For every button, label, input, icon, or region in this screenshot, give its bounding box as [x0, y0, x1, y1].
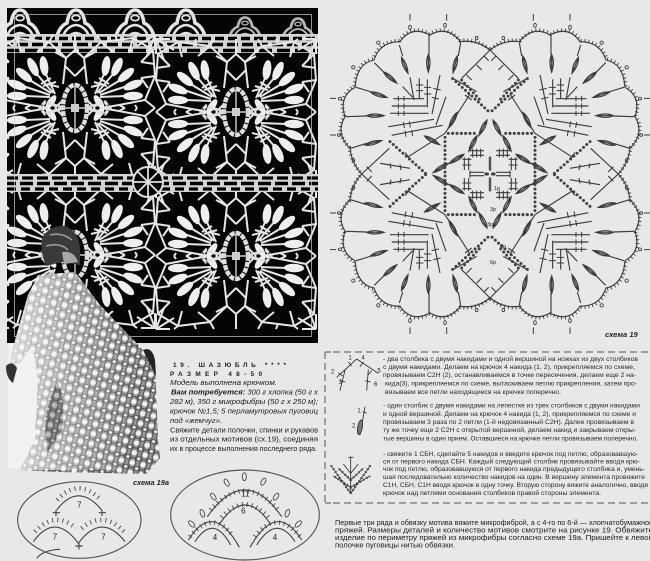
assembly instructions: Свяжите детали полочки, спинки и рукавов [170, 426, 318, 434]
stitch symbol 2: 1 [357, 409, 361, 415]
photo frame line [14, 14, 312, 336]
stitch description 3: крючок над петлями основания столбиков правой стороны элемента. [383, 489, 601, 497]
assembly instructions: их в процессе выполнения последнего ряда. [170, 444, 317, 453]
scheme row labels: 1р [494, 186, 500, 192]
materials: 282 м), 350 г микрофибры (50 г х 250 м); [169, 397, 318, 406]
lace motif: top-right [156, 39, 316, 185]
chart: scheme 19a right oval [171, 470, 319, 560]
stitch description 2: провязываем 3 раза по 2 петли (1-й недовязанный С2Н). Далее провязываем в [383, 418, 635, 426]
assembly instructions [170, 426, 318, 453]
closing paragraph: полочке пуговицы нитью обвязки. [335, 540, 455, 550]
chart: scheme 19a left oval: 7 [101, 532, 106, 541]
stitch description 2: ту же точку еще 2 С2Н с открытой вершиной, делаем накид и закрываем откры- [383, 426, 636, 434]
coat opening [45, 382, 63, 452]
stitch description 3 [383, 450, 648, 497]
stitch description 2: - один столбик с двумя накидами на лепестке из трех столбиков с двумя накидами [383, 402, 640, 410]
chart: scheme 19a left oval: 7 [53, 532, 58, 541]
stitch symbol 3 [331, 457, 371, 493]
lace motif: top-left [0, 35, 155, 181]
article title: 19. ШАЗЮБЛЬ **** [173, 362, 286, 369]
hands [6, 363, 17, 383]
scheme row labels: 5р [500, 244, 506, 250]
lace scalloped top edging [1, 10, 313, 37]
stitch symbol 1: 3 [339, 380, 343, 386]
stitch symbol 1: 5 [377, 369, 381, 375]
lace net band [2, 34, 318, 53]
stitch symbol 1: 1 [348, 355, 352, 361]
chart: scheme 19a right oval: 4 [213, 533, 218, 542]
lace motif: lower-left [0, 182, 155, 328]
closing paragraph: изделие по периметру пряжей из микрофибры согласно схеме 19а. Пришейте к левой [335, 533, 650, 542]
stitch description 3: - свяжите 1 СБН, сделайте 5 накидов и введите крючок под петлю, образовавшую- [383, 450, 638, 458]
article text block [169, 362, 318, 453]
materials [169, 388, 318, 425]
stitch description 2: и одной вершиной. Делаем на крючок 4 накида (1, 2), прикрепляемся по схеме и [383, 410, 637, 418]
caption: scheme 19a: схема 19а [133, 478, 169, 487]
chart: scheme 19a right oval: 11 [241, 490, 250, 499]
chart: scheme 19a left oval [18, 482, 141, 558]
stitch description 1: вязываем все петли находящиеся на крючке поперечно. [385, 389, 561, 396]
stitch symbol 1: 2 [331, 369, 335, 375]
stitch description 3: шая последовательно количество накидов на один. В вершину элемента провяжите [383, 474, 646, 481]
closing paragraph [335, 518, 650, 550]
light folds of coat [10, 272, 143, 470]
stitch description 1: - два столбика с двумя накидами и одной вершиной на ножках из двух столбиков [383, 355, 639, 363]
stitch symbol 1: 6 [374, 382, 378, 388]
caption: scheme 19: схема 19 [605, 330, 639, 339]
chart: scheme 19a right oval: 4 [273, 533, 278, 542]
stitch symbol 1 [331, 355, 381, 391]
lace middle seam net [3, 167, 318, 197]
scheme row labels [487, 186, 506, 266]
stitch symbol 2 [352, 407, 367, 435]
dashed divider frame [325, 352, 650, 503]
photo: crochet lace panel on black [0, 8, 318, 343]
stitch symbol 2: 2 [352, 423, 356, 429]
materials: крючок №1,5; 5 перламутровых пуговиц [170, 406, 318, 416]
stitch description 1: с двумя накидами. Делаем на крючок 4 накида (1, 2), прикрепляемся по схеме, [383, 364, 635, 371]
pale area beside figure [8, 343, 48, 468]
scheme row labels: 3р [487, 222, 493, 228]
stitch description 3: чок под петлю, образовавшуюся от первого накида предыдущего столбика и, умень- [383, 465, 645, 473]
hair [42, 226, 80, 266]
size line: РАЗМЕР 48-50 [170, 371, 262, 378]
model note: Модель выполнена крючком. [170, 378, 277, 387]
chart: scheme 19a right oval: 6 [241, 506, 246, 515]
assembly instructions: из отдельных мотивов (сх.19), соединяя [170, 434, 318, 444]
stitch description 1: кида(3), прикрепляемся по схеме, вытаскиваем петлю прикрепления, затем про- [385, 380, 637, 388]
stitch symbol 1: 4 [361, 355, 365, 361]
stitch description 1: провязываем С2Н (2), останавливаемся в точке пересечения, делаем еще 2 на- [383, 372, 636, 379]
materials: Вам потребуется: 300 г хлопка (50 г х [171, 388, 318, 396]
scheme row labels: 6р [490, 260, 496, 266]
materials: под «жемчуг». [170, 416, 222, 425]
lace motif: lower-right [156, 183, 316, 329]
closing paragraph: пряжей. Размеры деталей и количество мотивов смотрите на рисунке 19. Обвяжите [335, 526, 650, 534]
scheme row labels: 3р [490, 207, 496, 213]
stitch description 2: тые вершины в один прием. Оставшиеся на крючке петли провязываем поперечно. [383, 436, 638, 442]
lace coat [10, 272, 160, 474]
stitch description 3: ся от первого накида СБН. Каждый следующий столбик провязывайте вводя крю- [383, 458, 640, 466]
chart: crochet scheme 19 [330, 14, 650, 334]
stitch description 1 [383, 355, 639, 396]
stitch description 3: С1Н, СБН, С1Н вводя крючок в одну точку. Вторую сторону вяжите аналогично, вводя [383, 482, 648, 489]
chart: scheme 19a left oval: 7 [77, 501, 82, 510]
stitch description 2 [383, 402, 640, 442]
photo: woman in lace coat [6, 226, 160, 474]
